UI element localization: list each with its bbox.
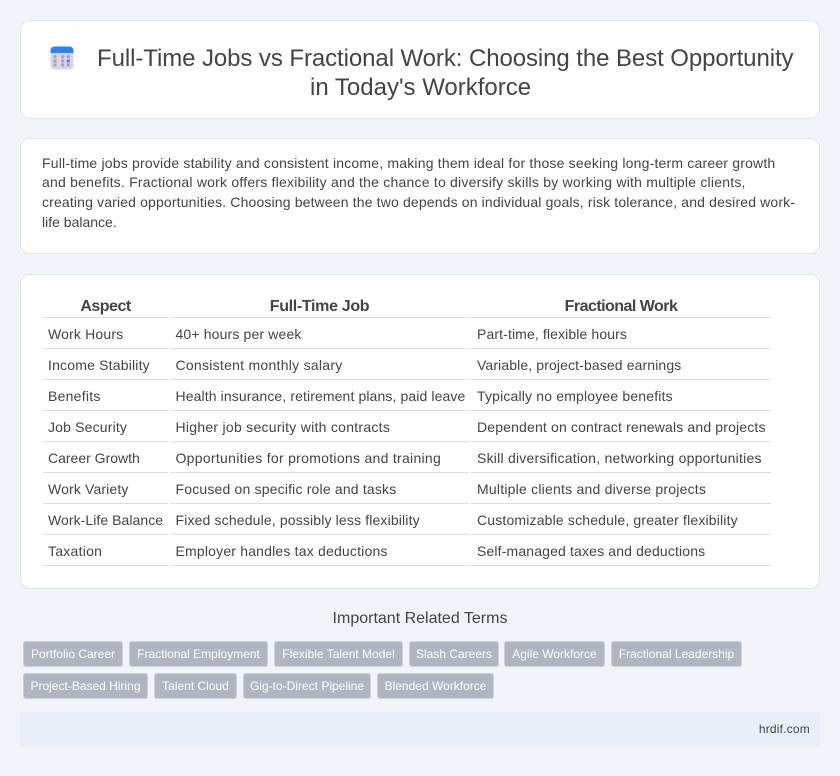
tag bbox=[611, 641, 742, 667]
tag: Agile Workforce bbox=[512, 647, 597, 661]
panel: title card bbox=[20, 20, 820, 119]
row: work-life balance bbox=[48, 512, 738, 528]
row: work variety: Focused on specific role and tasks bbox=[176, 481, 396, 497]
row: taxation bbox=[48, 543, 705, 559]
tag bbox=[504, 641, 605, 667]
tag bbox=[23, 673, 148, 699]
row: career growth: Opportunities for promotions and training bbox=[176, 450, 441, 466]
row: work-life balance: Customizable schedule, greater flexibility bbox=[477, 512, 738, 528]
row: job security: Dependent on contract renewals and projects bbox=[477, 419, 766, 435]
row: job security bbox=[48, 419, 766, 435]
table header: fractional work: Fractional Work bbox=[565, 298, 677, 315]
tag: Fractional Employment bbox=[137, 647, 260, 661]
text block: description: and benefits. Fractional work offers flexibility and the chance to diversify skills by working with multiple clients, bbox=[42, 174, 746, 190]
heading: important related terms: Important Related Terms bbox=[333, 610, 507, 627]
row: income stability: Variable, project-based earnings bbox=[477, 357, 681, 373]
row: work-life balance: Work-Life Balance bbox=[48, 512, 163, 528]
row: work hours: Part-time, flexible hours bbox=[477, 326, 627, 342]
row: work hours bbox=[48, 326, 627, 342]
table header: full-time job: Full-Time Job bbox=[270, 298, 369, 315]
row: benefits: Benefits bbox=[48, 388, 101, 404]
row: taxation: Taxation bbox=[48, 543, 102, 559]
row: income stability bbox=[48, 357, 681, 373]
text block: description bbox=[42, 155, 795, 230]
row: job security: Higher job security with contracts bbox=[176, 419, 390, 435]
panel: comparison table bbox=[20, 274, 820, 589]
tag: Slash Careers bbox=[416, 647, 492, 661]
tag: Talent Cloud bbox=[162, 679, 229, 693]
row: taxation: Self-managed taxes and deductions bbox=[477, 543, 705, 559]
tag bbox=[23, 641, 123, 667]
row: work hours: 40+ hours per week bbox=[176, 326, 302, 342]
tag bbox=[409, 641, 499, 667]
title: Full-Time Jobs vs Fractional Work: Choosing the Best Opportunity bbox=[97, 45, 793, 72]
row: work hours: Work Hours bbox=[48, 326, 123, 342]
row: income stability: Consistent monthly salary bbox=[176, 357, 343, 373]
tag: Portfolio Career bbox=[31, 647, 115, 661]
row: benefits bbox=[48, 388, 673, 404]
row: career growth: Skill diversification, networking opportunities bbox=[477, 450, 762, 466]
row: work variety: Work Variety bbox=[48, 481, 129, 497]
tag bbox=[377, 673, 494, 699]
tag: Gig-to-Direct Pipeline bbox=[250, 679, 364, 693]
tag: Blended Workforce bbox=[385, 679, 486, 693]
row: benefits: Typically no employee benefits bbox=[477, 388, 673, 404]
tag bbox=[243, 673, 371, 699]
title bbox=[97, 45, 794, 101]
row: career growth: Career Growth bbox=[48, 450, 140, 466]
tag: Flexible Talent Model bbox=[282, 647, 395, 661]
row: work variety: Multiple clients and diverse projects bbox=[477, 481, 706, 497]
tag bbox=[274, 641, 403, 667]
row: career growth bbox=[48, 450, 762, 466]
text block: description: life balance. bbox=[42, 214, 117, 230]
row: job security: Job Security bbox=[48, 419, 127, 435]
text block: description: creating varied opportunities. Choosing between the two depends on individual goals, risk tolerance, and desired work- bbox=[42, 194, 795, 210]
row: taxation: Employer handles tax deductions bbox=[176, 543, 388, 559]
row: benefits: Health insurance, retirement plans, paid leave bbox=[176, 388, 465, 404]
text block: description: Full-time jobs provide stability and consistent income, making them ideal for those seeking long-term career growth bbox=[42, 155, 775, 171]
footer bar bbox=[20, 712, 820, 746]
row: work variety bbox=[48, 481, 706, 497]
panel: description card bbox=[20, 138, 820, 254]
row: income stability: Income Stability bbox=[48, 357, 150, 373]
tag: Fractional Leadership bbox=[619, 647, 734, 661]
title: in Today's Workforce bbox=[310, 74, 531, 101]
table header: aspect: Aspect bbox=[80, 298, 131, 315]
icon: calendar bbox=[50, 46, 74, 70]
tag bbox=[129, 641, 268, 667]
tag: Project-Based Hiring bbox=[30, 679, 141, 693]
footer text: hrdif.com bbox=[759, 722, 810, 736]
row: work-life balance: Fixed schedule, possibly less flexibility bbox=[176, 512, 420, 528]
tag bbox=[154, 673, 237, 699]
